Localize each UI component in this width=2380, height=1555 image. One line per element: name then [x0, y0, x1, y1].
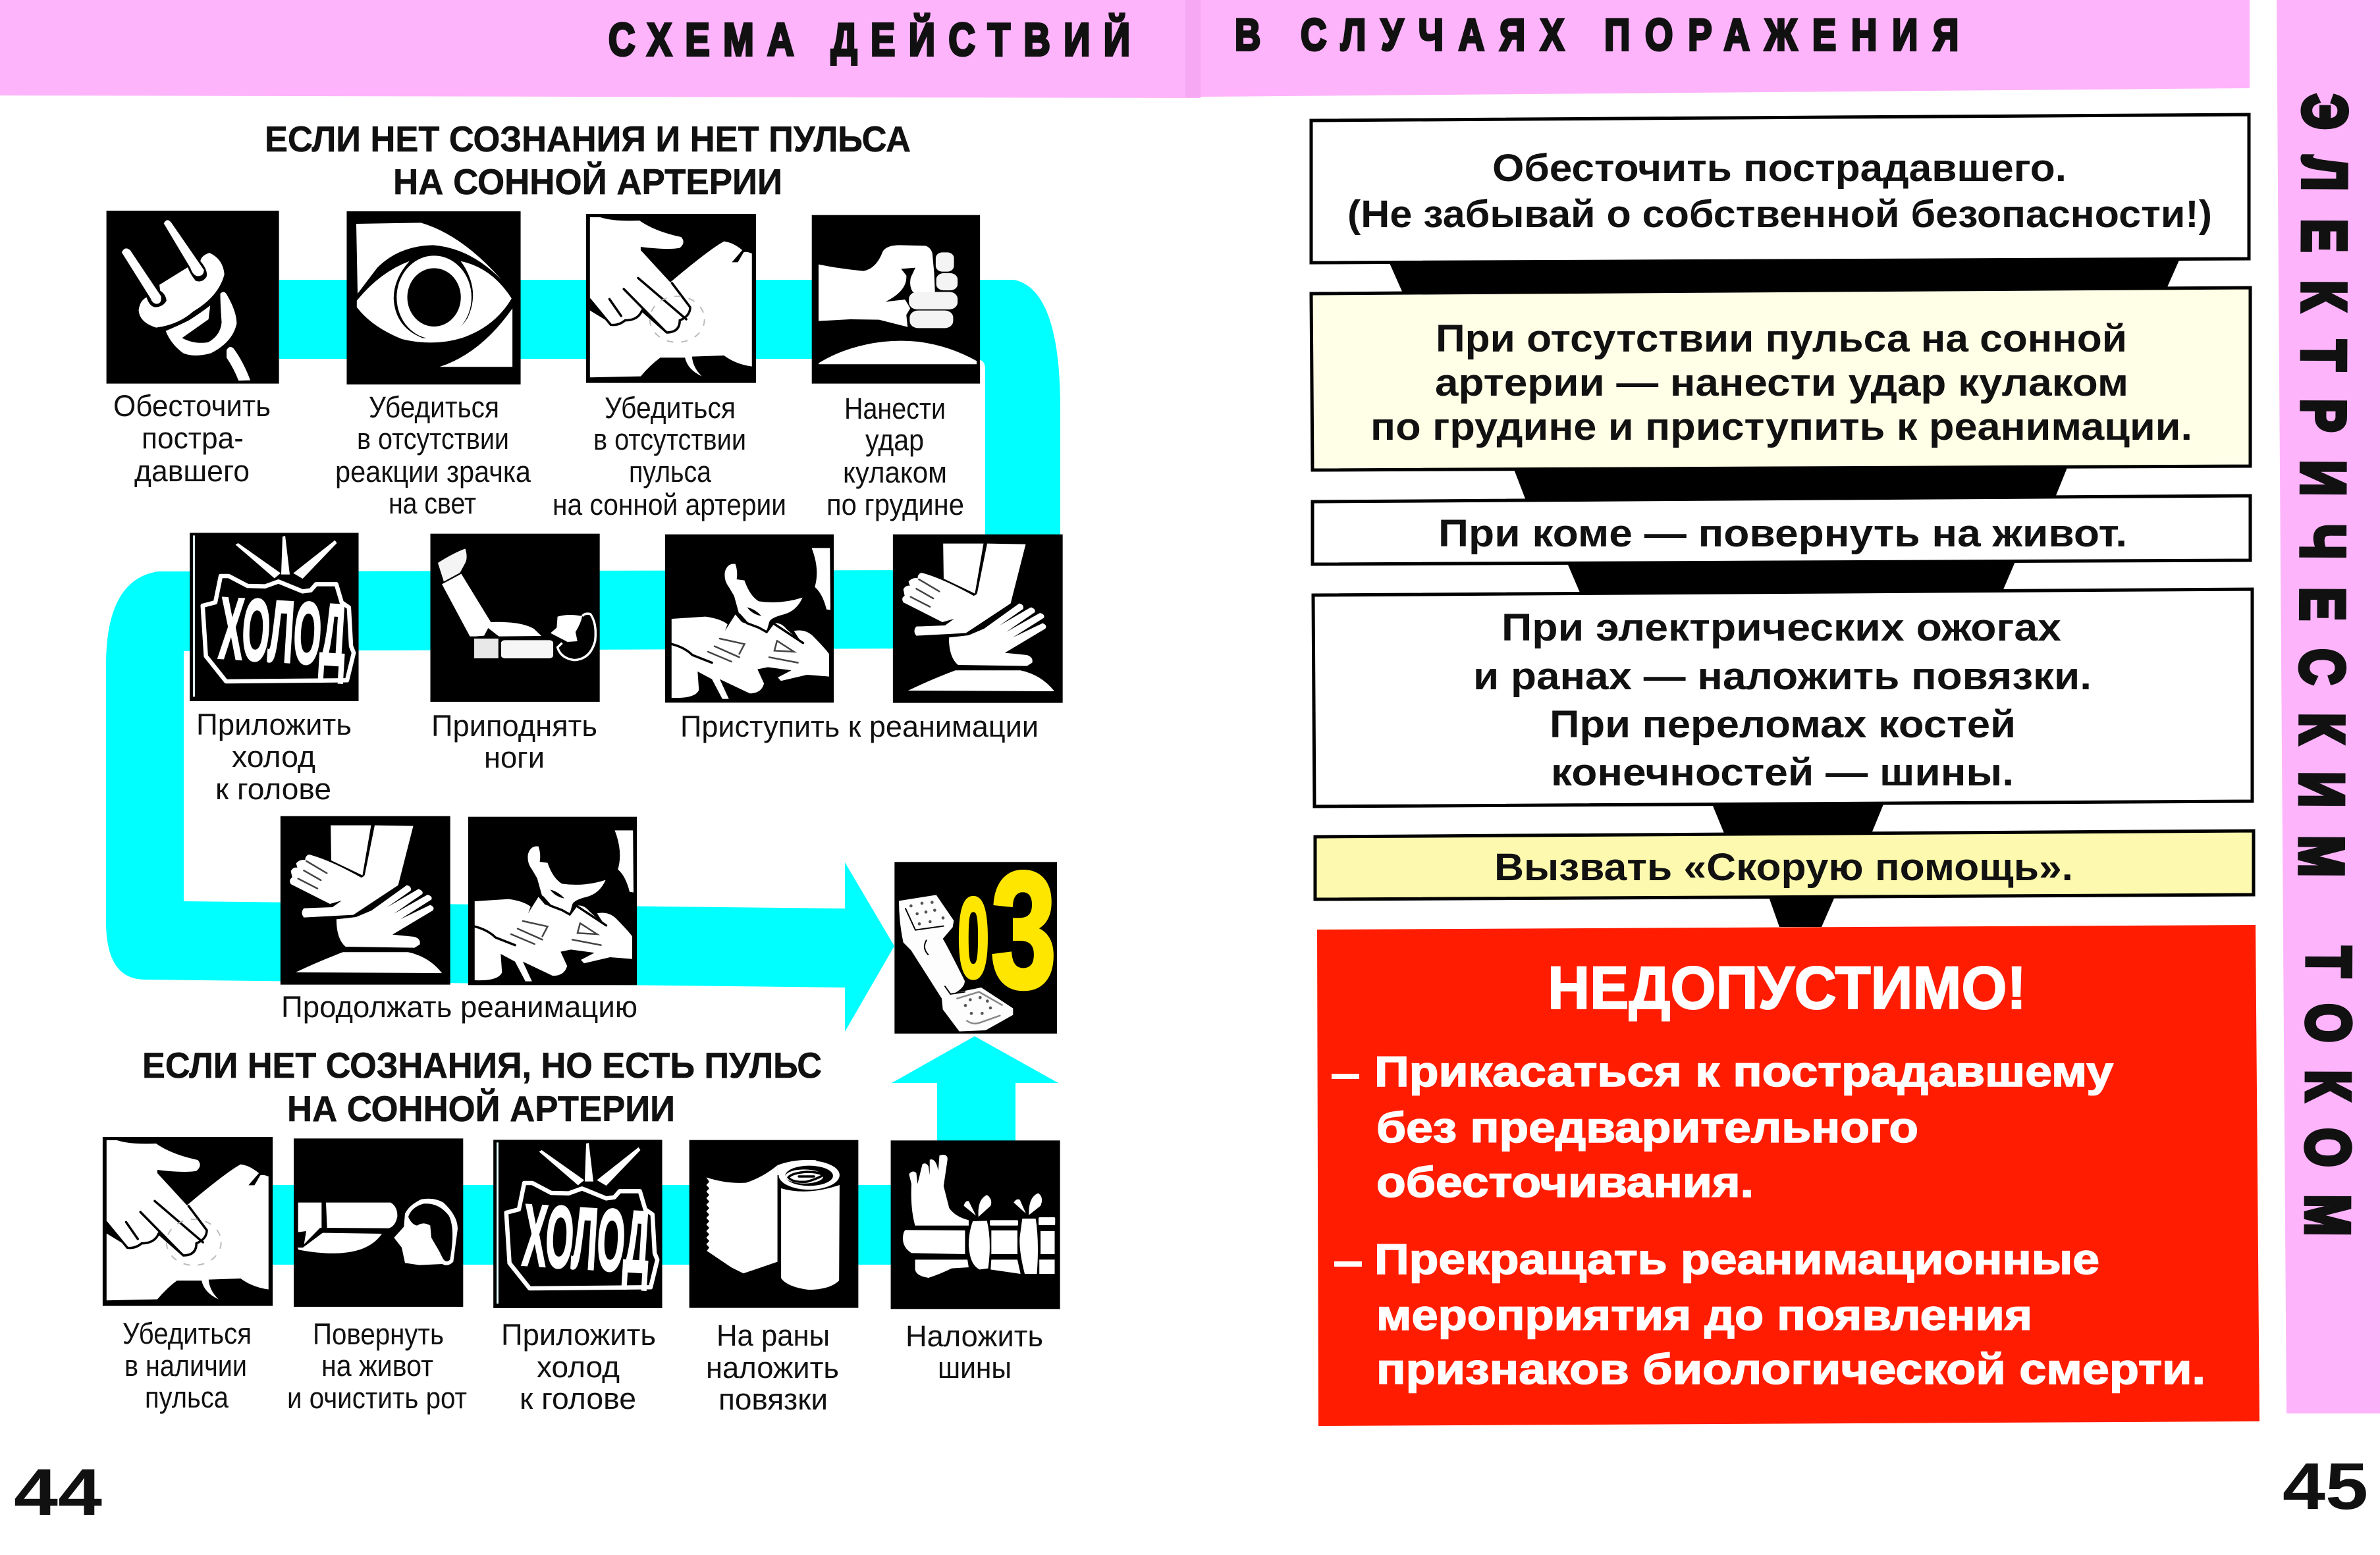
label: check pulse: пульса — [629, 455, 712, 488]
text block: second warning: Прекращать реанимационные — [1374, 1235, 2099, 1283]
panel: step 4 burns and fractures: При переломах костей — [1550, 703, 2016, 746]
heading: no consciousness, pulse present: НА СОННОЙ АРТЕРИИ — [287, 1088, 675, 1129]
panel: step 2 pulse and strike: При отсутствии пульса на сонной — [1436, 317, 2127, 360]
text block: first warning: Прикасаться к пострадавшему — [1374, 1047, 2113, 1095]
label: strike: удар — [865, 423, 924, 457]
text block: second warning — [1334, 1235, 2205, 1393]
label: bandage wounds: повязки — [718, 1383, 828, 1416]
label: check pulse — [553, 391, 786, 521]
label: turn over: на живот — [321, 1349, 433, 1383]
arrow: black connector 5 — [1768, 895, 1835, 927]
icon: telephone 03: 3 — [991, 839, 1056, 1022]
label: apply cold, repeat: Приложить — [501, 1318, 656, 1352]
label: apply cold, repeat — [501, 1318, 656, 1415]
label: de-energize — [113, 389, 271, 488]
text block: first warning: без предварительного — [1376, 1103, 1918, 1151]
label: raise legs: ноги — [484, 741, 545, 774]
label: check pupil: Убедиться — [369, 390, 499, 424]
panel: step 2 pulse and strike: артерии — нанести удар кулаком — [1435, 361, 2128, 404]
label: check pulse: на сонной артерии — [553, 488, 786, 521]
icon: splinted limb — [891, 1140, 1060, 1309]
side title: vertical text: ТОКОМ — [2292, 947, 2363, 1236]
label: turn over: и очистить рот — [287, 1381, 467, 1415]
label: check for pulse: в наличии — [124, 1349, 247, 1383]
label: continue resuscitation: Продолжать реанимацию — [281, 990, 637, 1024]
arrow: cyan bar of bottom row — [263, 1185, 896, 1265]
arrow: black connector 1 — [1388, 259, 2180, 293]
icon: hand checking pulse, repeat — [103, 1137, 273, 1306]
label: apply cold, repeat: к голове — [520, 1382, 636, 1415]
icon: turned on stomach, clearing mouth — [294, 1138, 463, 1307]
icon: artificial ventilation — [665, 535, 834, 702]
arrow: cyan flow across first row and down — [279, 280, 1060, 535]
label: de-energize: постра- — [142, 421, 244, 455]
heading: no consciousness and no pulse: ЕСЛИ НЕТ СОЗНАНИЯ И НЕТ ПУЛЬСА — [265, 119, 911, 159]
label: check pulse: в отсутствии — [593, 423, 746, 456]
icon: artificial ventilation, repeat — [468, 817, 637, 985]
icon: cold pack — [190, 533, 359, 701]
label: check pupil: на свет — [389, 487, 476, 520]
icon: cold pack, repeat: ХОЛОД — [520, 1187, 653, 1292]
arrow: black connector 3 — [1566, 560, 2016, 593]
panel: step 3 coma: При коме — повернуть на живот. — [1438, 512, 2127, 555]
panel: pink header band, left page — [0, 0, 1201, 98]
arrow: black connector 4 — [1711, 801, 1885, 835]
panel: step 1 de-energize: Обесточить пострадавшего. — [1492, 147, 2067, 190]
icon: hand checking carotid pulse — [586, 214, 756, 383]
panel: step 1 de-energize: (Не забывай о собственной безопасности!) — [1347, 193, 2212, 236]
heading: forbidden: НЕДОПУСТИМО! — [1548, 955, 2026, 1022]
label: bandage wounds: На раны — [717, 1319, 830, 1352]
panel: step 1 de-energize — [1311, 115, 2249, 263]
label: bandage wounds — [706, 1319, 839, 1416]
icon: cold pack, repeat — [493, 1140, 663, 1308]
label: apply splints: Наложить — [906, 1319, 1043, 1353]
side title: vertical text: ЭЛЕКТРИЧЕСКИМ — [2286, 94, 2359, 877]
arrow: cyan flow second row, around the left to the 03 icon — [106, 570, 922, 1032]
text block: first warning: обесточивания. — [1376, 1158, 1754, 1206]
side title: vertical text — [2286, 94, 2363, 1236]
label: check for pulse: пульса — [145, 1381, 229, 1414]
label: apply splints: шины — [938, 1351, 1012, 1384]
label: raise legs: Приподнять — [431, 709, 597, 743]
icon: chest compressions, repeat — [281, 816, 450, 985]
icon: raised legs — [431, 534, 600, 702]
panel: step 4 burns and fractures: конечностей — шины. — [1551, 751, 2014, 794]
label: apply splints — [906, 1319, 1043, 1384]
label: check for pulse — [122, 1317, 252, 1414]
panel: step 2 pulse and strike — [1311, 288, 2250, 470]
text block: first warning — [1332, 1047, 2113, 1206]
icon: cold pack: ХОЛОД — [217, 580, 349, 685]
label: apply cold, repeat: холод — [537, 1350, 620, 1384]
panel: step 3 coma — [1312, 496, 2250, 564]
panel: pink header band, right page — [1201, 0, 2250, 97]
icon: eye — [346, 211, 521, 384]
label: de-energize: Обесточить — [113, 389, 271, 423]
arrow: black connector 2 — [1513, 466, 2068, 500]
icon: bandage roll — [690, 1140, 858, 1308]
label: raise legs — [431, 709, 597, 774]
label: check for pulse: Убедиться — [122, 1317, 252, 1350]
heading: no consciousness and no pulse — [265, 119, 911, 202]
label: check pulse: Убедиться — [605, 391, 736, 425]
label: apply cold: холод — [232, 740, 315, 774]
label: strike — [826, 392, 964, 521]
text block: second warning: признаков биологической смерти. — [1376, 1345, 2205, 1393]
label: turn over — [287, 1317, 467, 1415]
heading: no consciousness, pulse present — [142, 1045, 822, 1129]
icon: telephone 03: 0 — [958, 874, 989, 1001]
label: apply cold: к голове — [215, 772, 331, 806]
icon: electric plug — [107, 211, 279, 384]
icon: chest compressions — [893, 535, 1063, 703]
title: left half: СХЕМА ДЕЙСТВИЙ — [609, 14, 1130, 65]
panel: step 4 burns and fractures: При электрических ожогах — [1501, 606, 2061, 649]
heading: no consciousness, pulse present: ЕСЛИ НЕТ СОЗНАНИЯ, НО ЕСТЬ ПУЛЬС — [142, 1045, 822, 1086]
label: strike: Нанести — [844, 392, 946, 425]
page number: 45: 45 — [2283, 1450, 2368, 1523]
label: check pupil: реакции зрачка — [335, 455, 531, 488]
label: strike: кулаком — [843, 456, 947, 489]
label: bandage wounds: наложить — [706, 1351, 839, 1384]
page number: 44: 44 — [14, 1456, 102, 1529]
icon: fist striking sternum — [812, 215, 980, 384]
arrow: cyan up arrow to the 03 icon — [892, 1036, 1058, 1146]
heading: no consciousness and no pulse: НА СОННОЙ АРТЕРИИ — [393, 161, 782, 202]
title: right half: В СЛУЧАЯХ ПОРАЖЕНИЯ — [1235, 10, 1959, 60]
label: apply cold: Приложить — [196, 708, 352, 741]
text block: second warning: мероприятия до появления — [1376, 1291, 2032, 1339]
panel: step 5 call ambulance: Вызвать «Скорую помощь». — [1494, 846, 2073, 889]
label: de-energize: давшего — [134, 454, 250, 488]
label: check pupil: в отсутствии — [357, 422, 509, 456]
panel: step 2 pulse and strike: по грудине и приступить к реанимации. — [1370, 406, 2192, 448]
label: check pupil — [335, 390, 531, 520]
label: start resuscitation: Приступить к реанимации — [680, 710, 1039, 743]
panel: step 5 call ambulance — [1315, 831, 2254, 899]
panel: step 4 burns and fractures: и ранах — наложить повязки. — [1473, 655, 2092, 698]
icon: telephone 03 — [894, 839, 1057, 1034]
panel: pink side strip — [2277, 0, 2380, 1413]
panel: step 4 burns and fractures — [1313, 589, 2252, 806]
label: apply cold — [196, 708, 352, 806]
label: strike: по грудине — [826, 488, 964, 521]
label: turn over: Повернуть — [313, 1317, 444, 1351]
panel: red warning — [1317, 925, 2259, 1426]
